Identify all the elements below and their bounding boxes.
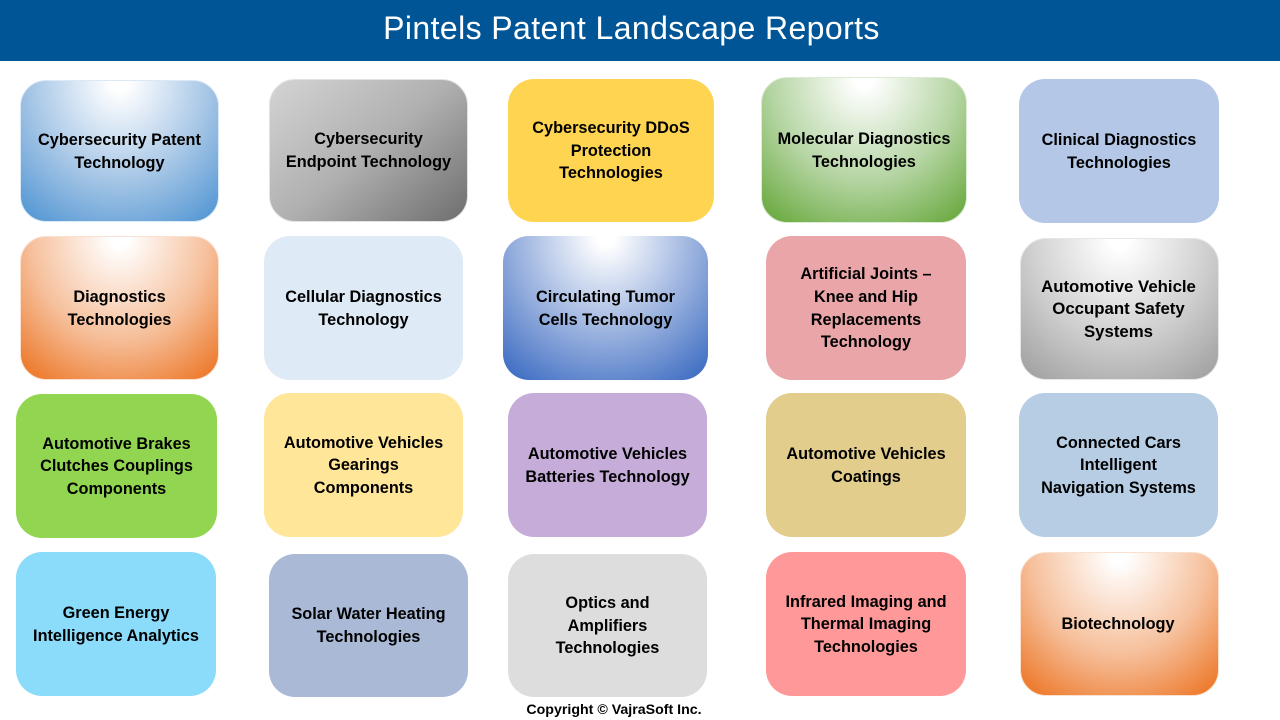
card: Infrared Imaging and Thermal Imaging Technologies: Technologies (814, 638, 918, 656)
card: Circulating Tumor Cells Technology: Circulating Tumor (536, 288, 675, 306)
card: Automotive Vehicle Occupant Safety Systems (1020, 238, 1219, 380)
card: Optics and Amplifiers Technologies (508, 554, 707, 697)
card: Diagnostics Technologies (20, 236, 219, 380)
card: Diagnostics Technologies: Diagnostics (73, 288, 166, 306)
card: Automotive Vehicle Occupant Safety Systems: Automotive Vehicle (1041, 277, 1196, 296)
card: Infrared Imaging and Thermal Imaging Technologies (766, 552, 966, 696)
title banner: Pintels Patent Landscape Reports (383, 10, 880, 46)
card: Diagnostics Technologies: Technologies (68, 310, 171, 328)
card: Automotive Vehicle Occupant Safety Systems: Occupant Safety (1052, 299, 1185, 318)
card: Cybersecurity Patent Technology (20, 80, 219, 222)
card: Solar Water Heating Technologies (269, 554, 468, 697)
card: Cellular Diagnostics Technology (264, 236, 463, 380)
card: Cybersecurity Patent Technology: Technology (74, 154, 165, 172)
card: Connected Cars Intelligent Navigation Systems: Navigation Systems (1041, 479, 1196, 497)
card: Artificial Joints Knee and Hip Replacements Technology: Replacements (811, 310, 921, 328)
card: Connected Cars Intelligent Navigation Systems (1019, 393, 1218, 537)
card: Automotive Brakes Clutches Couplings Components: Automotive Brakes (42, 435, 191, 453)
card: Clinical Diagnostics Technologies: Clinical Diagnostics (1042, 131, 1196, 149)
card: Green Energy Intelligence Analytics: Intelligence Analytics (33, 626, 199, 644)
card: Clinical Diagnostics Technologies (1019, 79, 1219, 223)
card: Connected Cars Intelligent Navigation Systems: Connected Cars (1056, 434, 1181, 452)
card: Artificial Joints Knee and Hip Replacements Technology: Artificial Joints – (800, 265, 932, 283)
card: Solar Water Heating Technologies: Technologies (317, 628, 420, 646)
title banner (0, 0, 1280, 61)
card: Molecular Diagnostics Technologies: Technologies (812, 152, 916, 170)
card: Molecular Diagnostics Technologies (761, 77, 967, 223)
card: Clinical Diagnostics Technologies: Technologies (1067, 154, 1171, 172)
card: Circulating Tumor Cells Technology: Cells Technology (539, 310, 672, 328)
card: Automotive Brakes Clutches Couplings Components: Clutches Couplings (40, 457, 193, 475)
card: Automotive Vehicles Batteries Technology: Batteries Technology (525, 468, 690, 486)
card: Connected Cars Intelligent Navigation Systems: Intelligent (1080, 456, 1157, 474)
card: Artificial Joints Knee and Hip Replacements Technology: Technology (821, 333, 911, 351)
card: Cybersecurity Endpoint Technology: Endpoint Technology (286, 153, 451, 171)
card: Cybersecurity Endpoint Technology (269, 79, 468, 222)
card: Cellular Diagnostics Technology: Cellular Diagnostics (285, 288, 442, 306)
card: Automotive Vehicles Gearings Components: Components (314, 479, 413, 497)
card: Artificial Joints Knee and Hip Replacements Technology (766, 236, 966, 380)
card: Artificial Joints Knee and Hip Replacements Technology: Knee and Hip (814, 288, 918, 306)
card: Automotive Vehicles Gearings Components (264, 393, 463, 537)
card: Cybersecurity DDoS Protection Technologies: Technologies (559, 164, 663, 182)
card: Optics and Amplifiers Technologies: Technologies (556, 639, 659, 657)
card: Cybersecurity Endpoint Technology: Cybersecurity (314, 130, 423, 148)
card: Circulating Tumor Cells Technology (503, 236, 708, 380)
card: Automotive Vehicles Batteries Technology: Automotive Vehicles (528, 445, 687, 463)
card: Cybersecurity DDoS Protection Technologies: Cybersecurity DDoS (532, 119, 690, 137)
card: Infrared Imaging and Thermal Imaging Technologies: Infrared Imaging and (785, 593, 947, 611)
card: Automotive Brakes Clutches Couplings Components: Components (67, 480, 166, 498)
card: Automotive Vehicles Coatings: Automotive Vehicles (786, 445, 946, 463)
card: Cybersecurity DDoS Protection Technologies: Protection (571, 142, 651, 160)
card: Biotechnology: Biotechnology (1061, 615, 1175, 633)
card: Cybersecurity DDoS Protection Technologies (508, 79, 714, 222)
card: Automotive Brakes Clutches Couplings Components (16, 394, 217, 538)
card: Green Energy Intelligence Analytics: Green Energy (63, 604, 169, 622)
card: Cellular Diagnostics Technology: Technology (318, 310, 409, 328)
card: Cybersecurity Patent Technology: Cybersecurity Patent (38, 131, 201, 149)
card: Automotive Vehicles Batteries Technology (508, 393, 707, 537)
card: Automotive Vehicles Gearings Components: Gearings (328, 456, 399, 474)
card: Infrared Imaging and Thermal Imaging Technologies: Thermal Imaging (801, 615, 931, 633)
card: Molecular Diagnostics Technologies: Molecular Diagnostics (778, 130, 950, 148)
card: Optics and Amplifiers Technologies: Amplifiers (568, 617, 647, 635)
card: Biotechnology (1020, 552, 1219, 696)
card: Green Energy Intelligence Analytics (16, 552, 216, 696)
card: Automotive Vehicles Coatings (766, 393, 966, 537)
card: Automotive Vehicles Gearings Components: Automotive Vehicles (284, 434, 443, 452)
card: Automotive Vehicle Occupant Safety Systems: Systems (1084, 322, 1153, 341)
card: Optics and Amplifiers Technologies: Optics and (565, 594, 650, 612)
card: Solar Water Heating Technologies: Solar Water Heating (291, 605, 446, 623)
card: Automotive Vehicles Coatings: Coatings (831, 468, 901, 486)
copyright note: Copyright © VajraSoft Inc. (526, 702, 702, 718)
